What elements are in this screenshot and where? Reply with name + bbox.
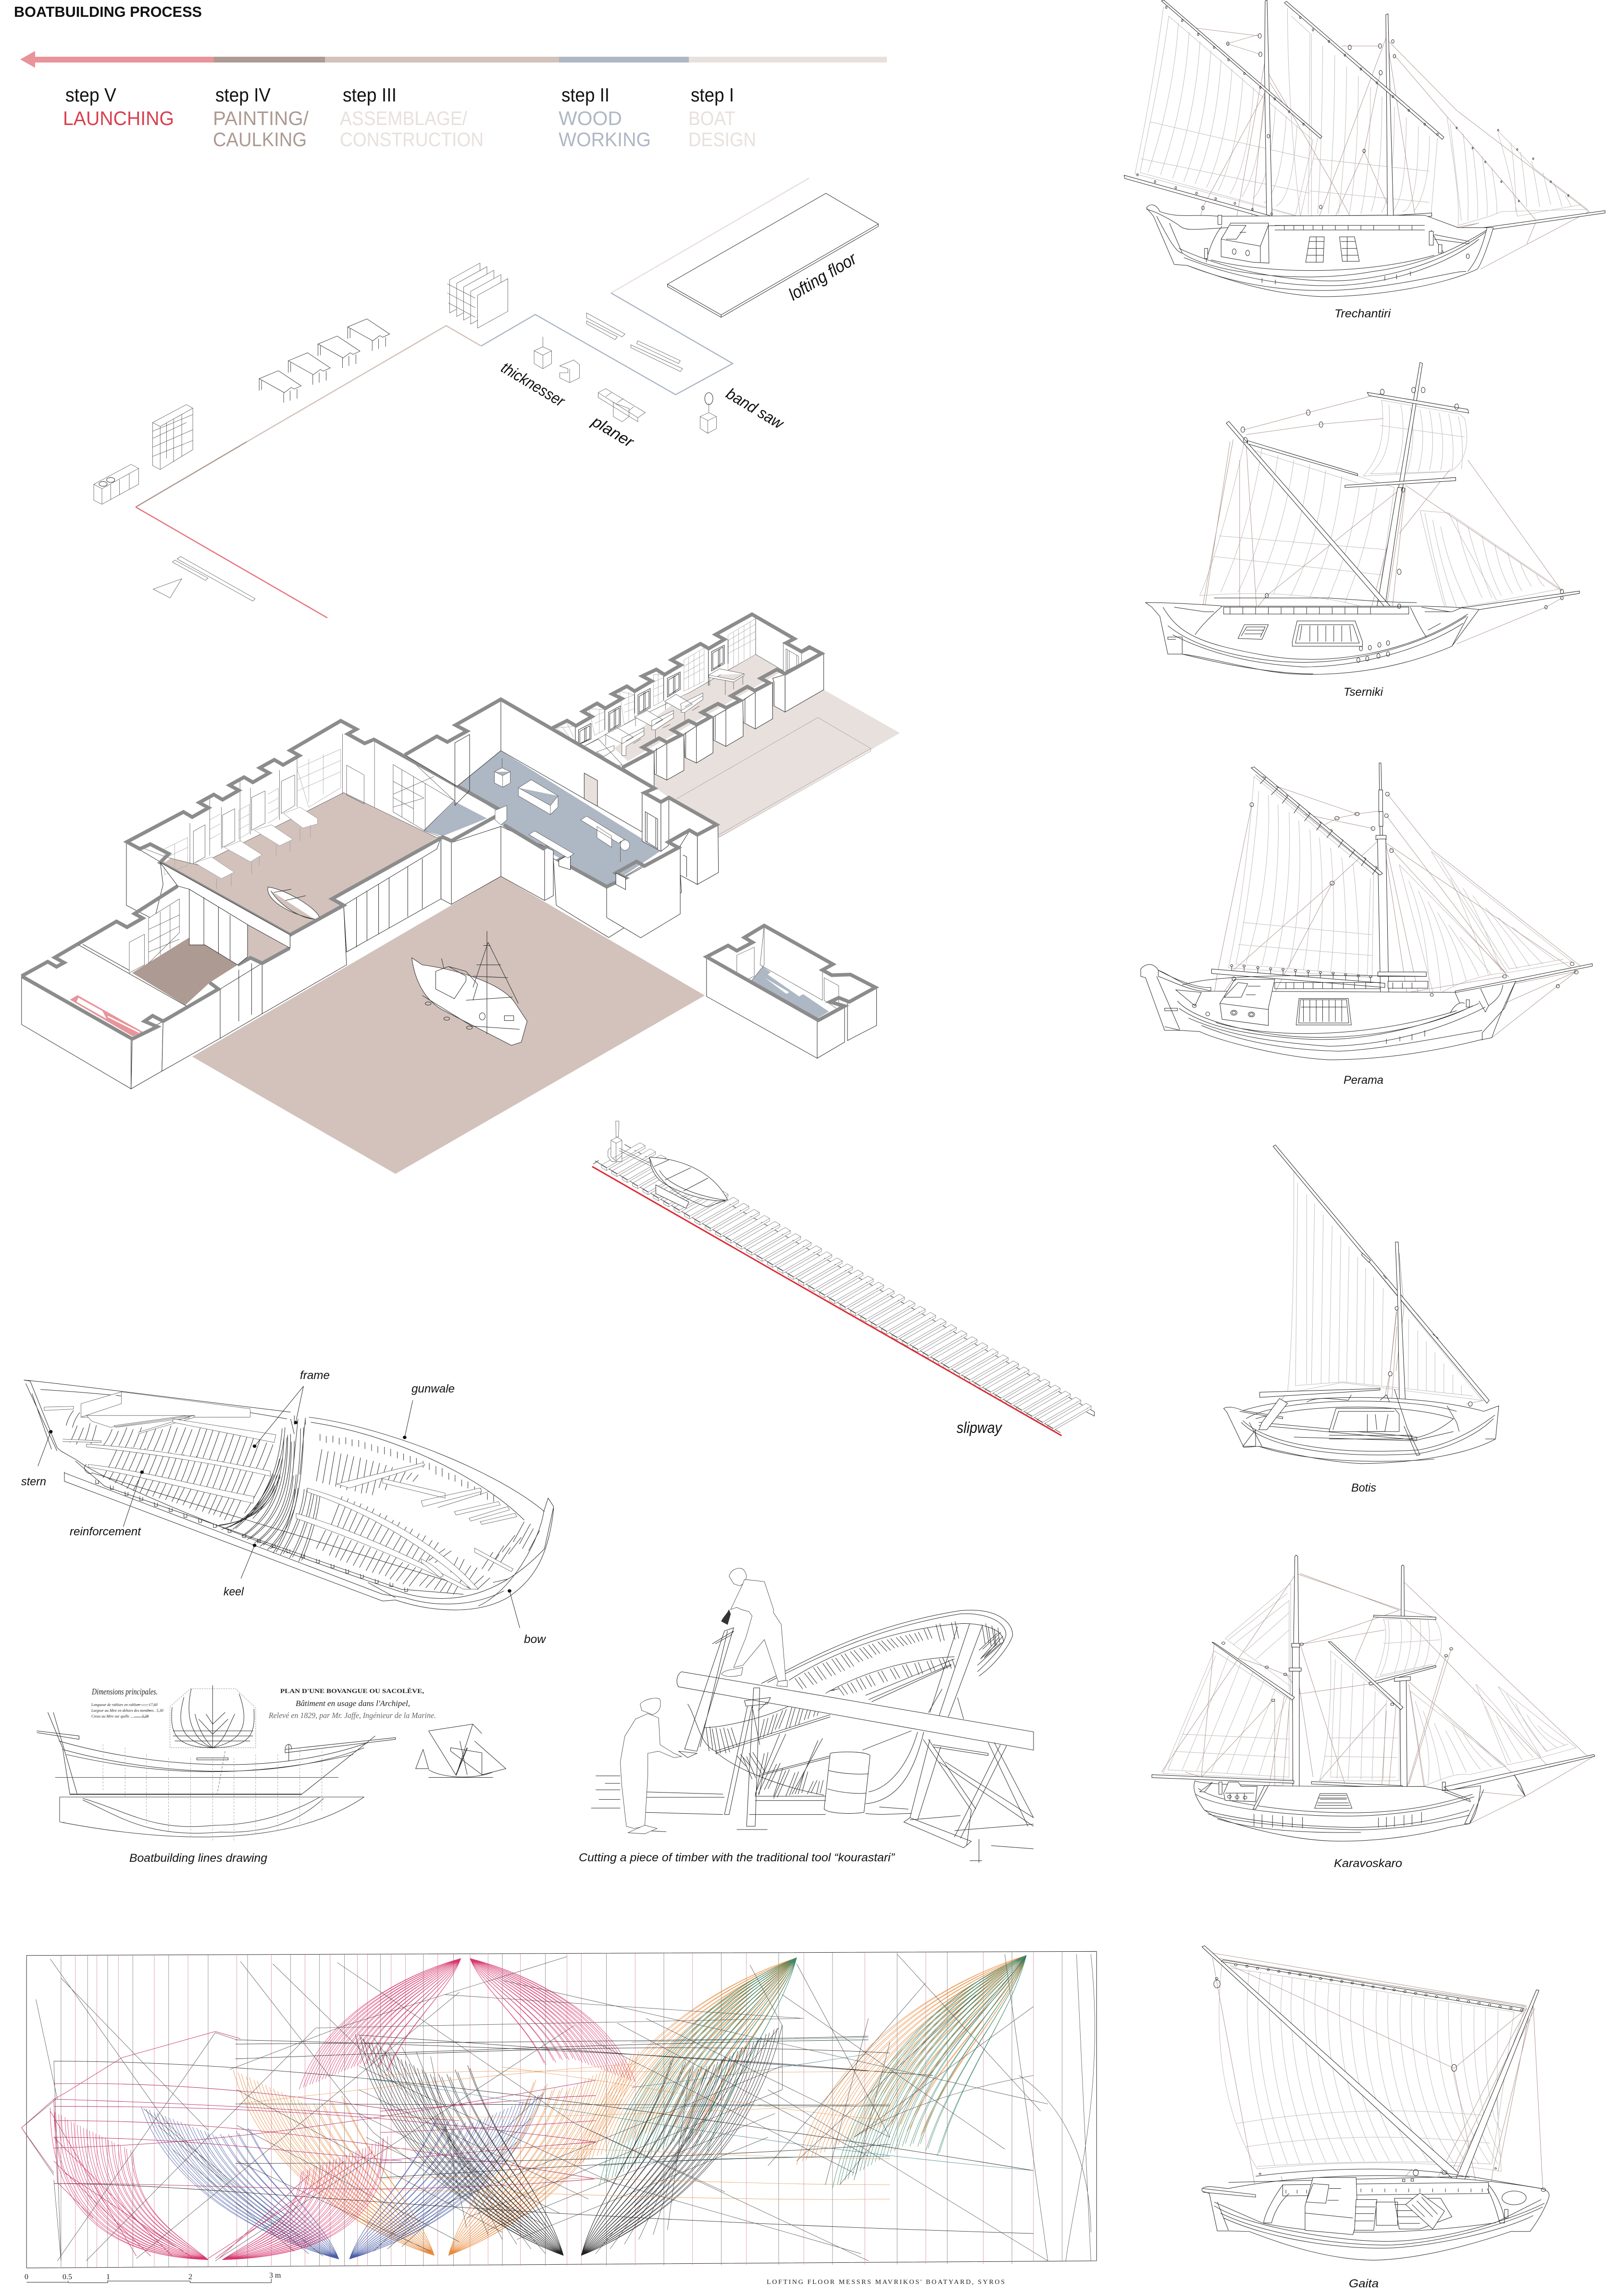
trestles [871,1623,1033,1848]
black fans [355,2025,782,2256]
green fans [599,1956,1026,2188]
central and exterior walls [22,827,682,1089]
blue fans [141,2093,543,2259]
design wing thick walls [552,615,822,767]
kourastari sketch [591,1568,1033,1863]
woodworking back walls [405,699,719,938]
woodworking machines [495,758,630,862]
cutting beams [586,313,683,372]
boat: Karavoskaro [1152,1555,1595,1841]
label: slipway: slipway [957,1419,1003,1436]
woodworking wall pier top [559,854,625,890]
frames converging [216,1416,320,1562]
hull structure drawing [24,1380,554,1628]
rigging [1161,1573,1594,1824]
small boat in assembly room [268,887,319,920]
label: band saw: band saw [723,384,787,433]
design and woodworking wings [405,615,900,938]
frames right [316,1434,540,1594]
assembly tables [195,807,317,889]
masts and spars [1152,1555,1595,1802]
step II label: WOOD [559,107,622,129]
hull outlines [24,1380,554,1610]
timber rack [448,263,508,328]
hull [1146,205,1494,297]
axonometric boatyard contents [412,758,877,1058]
sails [1200,400,1560,612]
step II label: WORKING [559,128,651,151]
station verticals [61,1952,1062,2267]
band saw machine [700,393,716,433]
waterline sweeps [54,2035,1033,2233]
scale labels: 3 m [269,2271,281,2280]
hull callout: gunwale: gunwale [411,1382,455,1395]
step III label: CONSTRUCTION [340,128,484,151]
yard floor [192,877,705,1174]
woodworking floor [424,751,661,886]
design back shelves and windows [556,617,756,745]
upper timber [677,1672,1033,1750]
leader lines [38,1386,520,1628]
lofting floor plate [22,1951,1096,2283]
hull [1194,1642,1525,1841]
deck beams [44,1392,517,1589]
caption: lines drawing: Boatbuilding lines drawing [129,1852,268,1865]
sink cabinet [94,464,138,504]
pink outer polygon [22,2032,373,2258]
scale labels: 2 [188,2273,192,2281]
sails [1163,1583,1576,1786]
plan heading text: Relevé en 1829, par Mr. Jaffe, Ingénieur de la Marine. [268,1711,436,1720]
assembly room floor [163,792,437,936]
hull [1141,777,1578,1060]
orange fans [233,1956,1026,2256]
step III label: ASSEMBLAGE/ [340,107,468,129]
fishing boat [412,931,527,1045]
work tables [259,319,390,402]
design wing pale ground [654,675,900,838]
label: planer: planer [589,412,638,451]
caption: Trechantiri: Trechantiri [1334,307,1391,320]
lines drawing [37,1685,506,1842]
scale labels [25,2271,281,2281]
wall section outlines west [22,721,504,1039]
boat: Perama [1141,763,1592,1060]
rigging [1281,1253,1484,1433]
boat: Tserniki [1145,363,1580,675]
spars [1202,1945,1539,2212]
scale bar [26,2279,271,2283]
plan heading text: Bâtiment en usage dans l'Archipel, [296,1699,410,1708]
hull [1145,387,1564,675]
plan heading text: Largeur au Mtre en dehors des membres . 5,30 [91,1708,163,1713]
ground lines [591,1776,1033,1863]
sail [1219,1960,1525,2171]
scale labels: 1 [106,2273,110,2281]
step V label: LAUNCHING [63,107,174,129]
step III label [340,85,484,151]
sails [1135,6,1587,226]
lofting floor slab [668,193,878,317]
design tables [584,669,744,766]
woodworking thick walls [405,699,717,887]
title: BOATBUILDING PROCESS [14,3,202,20]
step IV label [213,85,309,151]
workshop process diagram [94,178,878,618]
slipway [592,1121,1095,1436]
launching line [592,1167,1061,1436]
painting room interior [79,863,290,1006]
design room floor [614,654,783,761]
process path lines [136,178,809,618]
rigging [1198,393,1562,653]
hull callout: frame: frame [300,1369,330,1382]
assembly room back walls [127,721,454,865]
step V label: step V [65,85,116,106]
planer machine [598,389,646,422]
step II label [559,85,651,151]
assembly room rack [393,765,454,830]
design back wall [552,615,756,746]
hull [1224,1389,1499,1464]
rigging [1212,1953,1543,2233]
hull [1202,1978,1549,2260]
step I label [688,85,756,151]
step IV label: step IV [215,85,271,106]
tool cabinet [152,404,193,470]
ground markings [676,717,871,838]
step IV label: PAINTING/ [213,107,309,129]
lateen yard and mast [1260,1145,1489,1429]
sail [1287,1168,1482,1400]
step I label: BOAT [688,107,735,129]
frames left [66,1410,280,1522]
sail hoops [1234,1964,1523,2011]
rails [593,1144,1095,1433]
sloping straight lines [22,1954,1095,2261]
caption: Karavoskaro: Karavoskaro [1334,1857,1402,1870]
masts and spars [1124,0,1605,252]
table rules [134,1705,151,1717]
hull callout: bow: bow [524,1633,547,1646]
axonometric boatyard west [22,721,705,1174]
yard hoops [1137,6,1569,215]
detached workshop [707,926,877,1058]
process timeline arrow [20,51,887,68]
sails [1229,777,1571,997]
assembly room shelves [164,749,341,875]
triangle template and boards [153,556,255,601]
step III label: step III [343,85,397,106]
plan heading text: Longueur de rablure en rablure ....... 17,60 [91,1703,158,1707]
rigging [1208,786,1581,1038]
design front piers [622,653,824,787]
step IV label: CAULKING [213,128,307,151]
rigging [1192,27,1589,271]
step I label: DESIGN [688,128,756,151]
boat: Botis [1224,1145,1499,1464]
plan heading text: Creux au Mtre sur quille ........... 2,28 [91,1714,149,1719]
caption: Gaita: Gaita [1349,2277,1379,2290]
caption: kourastari: Cutting a piece of timber with the traditional tool “kourastari” [579,1851,895,1864]
body plan [170,1685,256,1748]
plan heading text: PLAN D'UNE BOVANGUE OU SACOLÈVE, [280,1687,424,1694]
step V label [63,85,174,129]
ground worker [620,1698,682,1834]
hull under construction [688,1610,1013,1804]
step II label: step II [561,85,610,106]
winch [608,1121,652,1167]
masts and spars [1226,363,1580,629]
boat: Trechantiri [1124,0,1605,297]
boat: Gaita [1202,1945,1549,2260]
step I label: step I [691,85,734,106]
design wing end room [752,615,822,671]
planks [601,1143,1091,1431]
caption: Perama: Perama [1344,1074,1383,1087]
scale labels: 0 [25,2273,28,2281]
planking hatching [706,1621,1003,1798]
hull profile [37,1712,396,1842]
plate caption: LOFTING FLOOR MESSRS MAVRIKOS' BOATYARD, SYROS [767,2279,1005,2286]
hull callout: reinforcement: reinforcement [70,1525,141,1538]
standing worker [722,1568,787,1687]
lattice of crossing lines [144,1957,1026,2256]
thicknesser machines [534,337,580,383]
hull callout: stern: stern [21,1475,46,1488]
scale labels: 0.5 [62,2273,72,2281]
painting room floor [132,938,237,1005]
plan heading text: Dimensions principales. [91,1687,158,1696]
props [678,1628,822,1826]
hull callout: keel: keel [224,1585,244,1598]
label: lofting floor: lofting floor [785,248,860,304]
frame lines [26,1951,1096,2268]
keel blocks [96,1480,508,1598]
pink fans [50,1958,635,2259]
launching slab [70,995,143,1036]
oil drum [824,1752,870,1813]
small rig elevation [416,1724,506,1778]
caption: Tserniki: Tserniki [1344,686,1383,699]
boat on slip [649,1157,728,1208]
caption: Botis: Botis [1351,1481,1376,1494]
label: thicknesser: thicknesser [498,358,569,411]
plan heading text [91,1687,436,1720]
mast and yards [1211,763,1592,1013]
